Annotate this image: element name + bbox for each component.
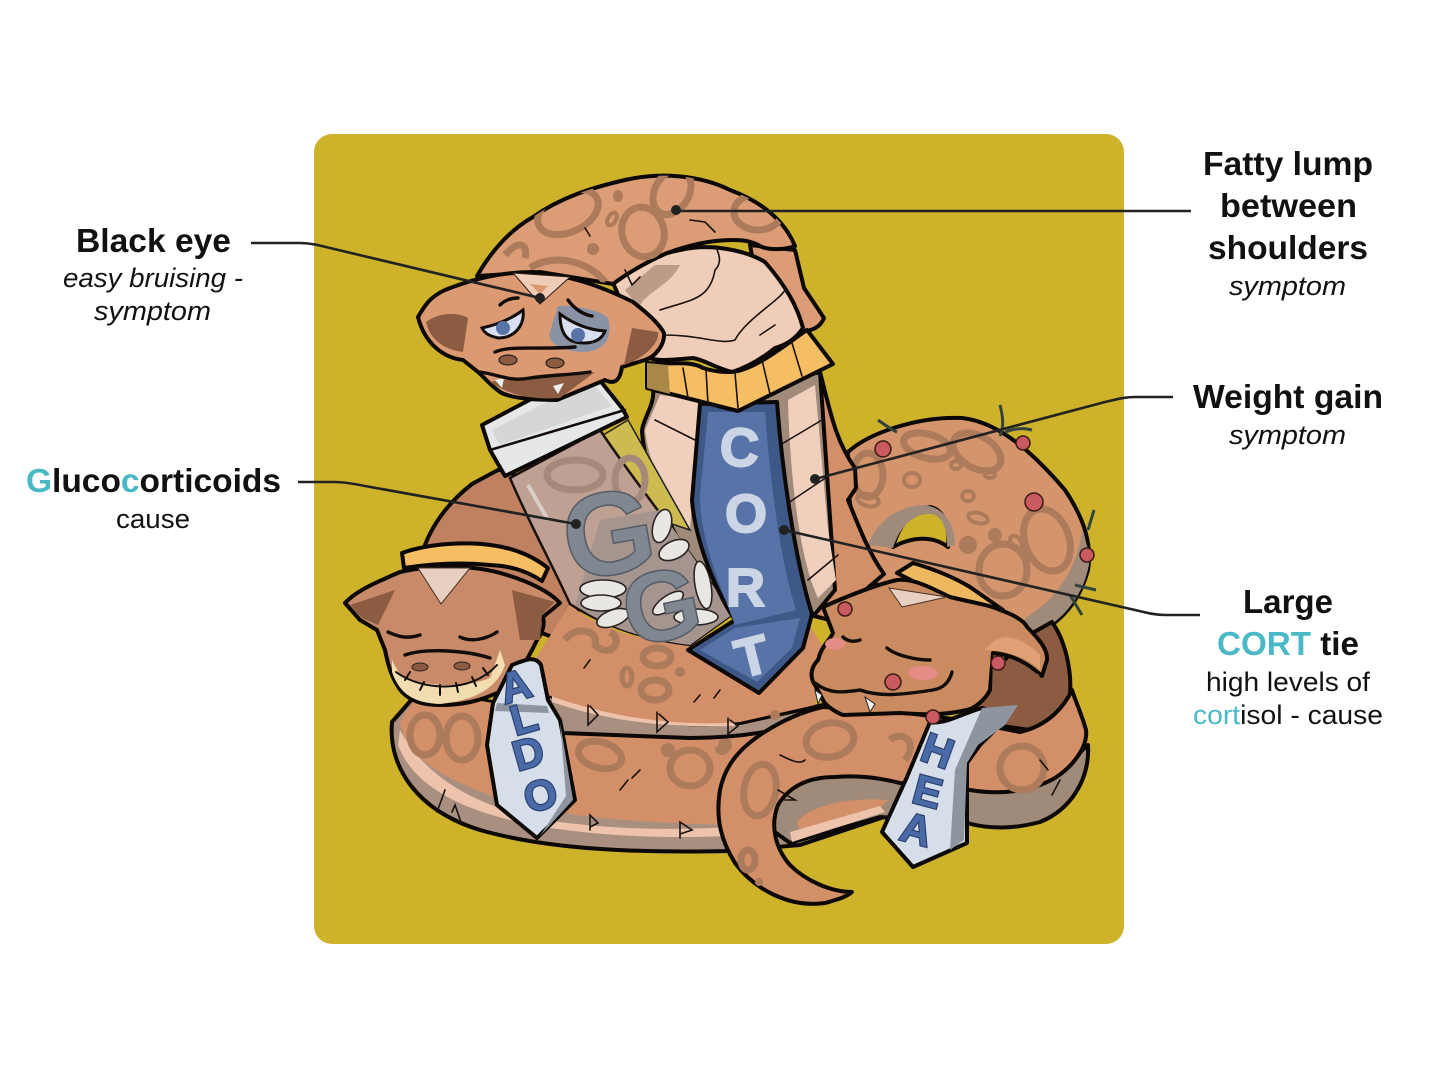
label: Black eye: easy bruising -	[63, 263, 243, 293]
label: Large CORT tie: high levels of	[1206, 667, 1371, 697]
middle coil	[530, 604, 830, 738]
label: Glucocorticoids: cause	[116, 504, 190, 534]
big G letters: G	[552, 461, 665, 607]
tie letters: R	[726, 558, 765, 618]
black eye bruise	[549, 306, 609, 352]
right head sleeping	[812, 563, 1047, 724]
label: Fatty lump: symptom	[1229, 271, 1346, 301]
pale fatty lump	[613, 245, 824, 372]
CORT tie	[688, 402, 812, 693]
label: Weight gain: symptom	[1229, 420, 1346, 450]
jar pills	[580, 507, 718, 631]
bottom coil	[392, 690, 890, 852]
HEA tie: A	[896, 803, 937, 856]
label: Fatty lump: between	[1220, 187, 1357, 224]
label: Fatty lump: Fatty lump	[1203, 145, 1373, 182]
top head with black eye	[418, 272, 664, 400]
left head sleeping	[345, 543, 560, 705]
label: Large CORT tie: CORT tie	[1217, 625, 1359, 662]
body column with pale belly	[642, 372, 884, 620]
label: Glucocorticoids: Glucocorticoids	[26, 462, 281, 499]
back brown coil	[960, 622, 1070, 730]
label: Large CORT tie: Large	[1243, 583, 1333, 620]
HEA tie: H	[915, 724, 960, 778]
label: Fatty lump	[671, 145, 1373, 301]
upper right coil	[848, 405, 1096, 650]
label: Large CORT tie	[779, 525, 1383, 730]
glass jar: G	[612, 544, 711, 669]
eyes	[482, 310, 523, 338]
spotted hood	[477, 163, 795, 285]
ALDO tie	[487, 659, 575, 838]
ALDO tie: A	[494, 659, 536, 713]
label: Black eye: Black eye	[76, 222, 231, 259]
label: Black eye	[63, 222, 545, 326]
ALDO tie: O	[518, 768, 563, 822]
tail and lower right coil	[715, 690, 1088, 904]
tie letters: T	[729, 624, 776, 690]
label: Large CORT tie: cortisol - cause	[1193, 700, 1383, 730]
glass jar	[482, 368, 733, 669]
body hump behind the left head	[420, 470, 590, 640]
HEA tie	[882, 705, 1018, 867]
label: Glucocorticoids	[26, 462, 581, 534]
label: Fatty lump: shoulders	[1208, 229, 1368, 266]
yellow illustration panel	[314, 134, 1124, 944]
ALDO tie: L	[505, 692, 543, 745]
yellow collar	[647, 330, 833, 411]
HEA tie: E	[908, 765, 947, 818]
ALDO tie: D	[507, 726, 549, 780]
tie letters: C	[718, 417, 760, 479]
tie letters	[718, 417, 776, 690]
illustration: three-headed snake	[345, 163, 1096, 904]
jar lid	[482, 368, 627, 476]
label: Weight gain: Weight gain	[1193, 378, 1383, 415]
label: Weight gain	[810, 378, 1383, 484]
label: Black eye: symptom	[94, 296, 211, 326]
tie letters: O	[725, 484, 767, 544]
